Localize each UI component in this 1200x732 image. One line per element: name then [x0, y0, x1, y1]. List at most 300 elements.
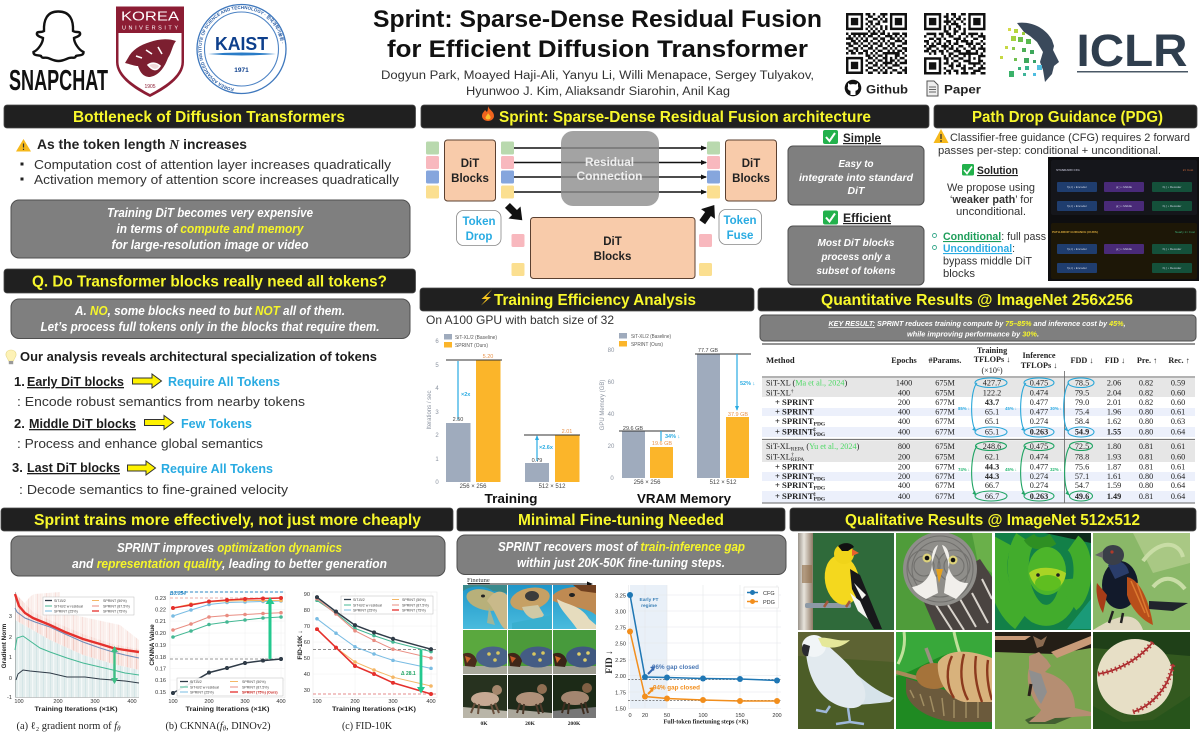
arrows: residual lines	[514, 148, 706, 192]
arrow: token drop	[501, 199, 528, 226]
arrow: token fuse	[695, 200, 721, 227]
chart: FID vs finetuning steps: 96% gap closed	[652, 665, 699, 671]
chart: FID vs finetuning steps: Early FT	[640, 597, 659, 603]
bar chart: VRAM memory: 256 × 256	[634, 480, 661, 486]
chart: FID vs finetuning steps: PDG	[763, 600, 775, 606]
annotations: blue percent labels: 85% ↓	[958, 406, 970, 411]
chart: CKNNA value: 0.16	[155, 678, 166, 684]
table rows: SiT-XL group: 1.96	[1107, 408, 1121, 416]
bar chart: VRAM memory: 40	[608, 412, 615, 418]
table rows: REPA group: 800	[898, 442, 910, 451]
table rows: SiT-XL group: 200	[898, 398, 910, 407]
item 3: last blocks: 3.	[12, 460, 23, 475]
bar chart: VRAM memory: VRAM Memory	[637, 491, 732, 506]
figure: standard CFG vs PDG pipeline: STANDARD CFG	[1056, 168, 1081, 172]
heading: PDG: Path Drop Guidance (PDG)	[972, 109, 1163, 126]
chart: FID-10K: 90	[304, 592, 310, 598]
table rows: REPA group: 44.3	[985, 472, 999, 481]
table rows: REPA group: 677M	[935, 462, 956, 472]
labels: step counts: 20K	[525, 721, 536, 727]
table rows: SiT-XL group: 677M	[935, 417, 956, 426]
table rows: REPA group: REPA	[791, 446, 804, 452]
text: conditional vs unconditional: blocks	[943, 268, 976, 280]
text: solution: unconditional.	[956, 206, 1026, 218]
text: CFG problem: Classifier-free guidance (CFG) requires 2 forward	[950, 132, 1190, 144]
callout: efficient: subset of tokens	[816, 265, 896, 277]
table header: Pre. ↑	[1137, 356, 1157, 365]
logo: KAIST: KOREA ADVANCED INSTITUTE OF SCIENCE AND TECHNOLOGY · 한국과학기술원 ·	[198, 6, 284, 92]
block: DiT left	[444, 140, 496, 201]
bar chart: VRAM memory: 0	[610, 476, 614, 482]
table rows: REPA group: (	[804, 442, 809, 451]
heading: qualitative results: Qualitative Results @ ImageNet 512x512	[845, 512, 1140, 529]
header: logos and title	[9, 4, 1188, 98]
box: residual connection	[561, 131, 659, 206]
item 3: last blocks: : Decode semantics to fine-grained velocity	[19, 483, 289, 497]
chart: FID-10K: 80	[304, 608, 310, 614]
callout: answer: Let’s process full tokens only in the blocks that require them.	[40, 320, 380, 334]
table rows: REPA group: 0.475	[1030, 442, 1048, 451]
table rows: REPA group: 0.61	[1171, 462, 1185, 472]
label: token drop	[456, 210, 501, 246]
figure: standard CFG vs PDG pipeline	[1048, 157, 1199, 281]
table rows: SiT-XL group: 0.60	[1171, 388, 1185, 398]
chart: FID-10K: SPRINT (87.5%)	[402, 604, 429, 608]
icon: lightning	[481, 290, 492, 306]
table: benchmark results	[762, 344, 1195, 503]
heading: PDG	[934, 105, 1197, 128]
item 1: early blocks: : Encode robust semantics from nearby tokens	[17, 395, 305, 409]
bar chart: VRAM memory: SPRINT (Ours)	[631, 342, 663, 348]
table rows: REPA group: 0.474	[1030, 452, 1048, 462]
bar chart: training speed: 3	[435, 410, 439, 416]
callout: key result: KEY RESULT: SPRINT reduces training compute by 75–85% and inference cost by 45%,	[828, 319, 1126, 328]
table rows: SiT-XL group: 79.0	[1075, 398, 1089, 407]
table rows: SiT-XL group: 54.9	[1075, 428, 1089, 436]
table rows: SiT-XL group: 65.1	[985, 408, 999, 416]
chart: FID vs finetuning steps: FID ↓	[605, 650, 615, 674]
callout: answer: A. NO, some blocks need to but NOT all of them.	[74, 304, 345, 318]
chart: FID-10K: SPRINT (75%)	[402, 608, 426, 612]
chart: CKNNA value: 0.21	[155, 619, 166, 625]
labels: step counts	[480, 721, 581, 727]
table rows: SiT-XL group: 400	[898, 428, 910, 436]
icon: warning	[16, 139, 31, 152]
figure: standard CFG vs PDG pipeline: f(x,t) • Encoder	[1067, 247, 1087, 251]
bar chart: training speed: 256 × 256	[460, 484, 487, 490]
bar chart: training speed: ×2.6x	[539, 445, 554, 451]
chart: gradient norm	[1, 592, 139, 732]
labels: step counts: 0K	[480, 721, 488, 727]
table rows: SiT-XL group: 0.80	[1139, 408, 1153, 416]
photo: goldfinch	[798, 533, 894, 630]
heading: training efficiency	[420, 288, 754, 311]
table rows: REPA group: 677M	[935, 472, 956, 481]
table rows: REPA group: SiT-XL	[766, 452, 791, 462]
logo: ICLR	[1000, 23, 1188, 82]
chart: FID vs finetuning steps: 50	[664, 713, 670, 719]
bar chart: training speed: Training	[484, 491, 538, 506]
chart: CKNNA value: SPRINT (75%) (Ours)	[242, 690, 278, 694]
bar chart: training speed: 6	[435, 339, 439, 345]
table rows: REPA group: 200	[898, 452, 910, 462]
table rows: SiT-XL group: 79.5	[1075, 388, 1089, 398]
chart: CKNNA value: SPRINT (87.5%)	[242, 686, 269, 690]
callout: simple: DiT	[848, 185, 866, 197]
callout: simple: Easy to	[838, 158, 874, 170]
title: for Efficient Diffusion Transformer	[387, 36, 808, 63]
chart: FID-10K: Δ 28.1	[401, 671, 416, 677]
QR code: Paper	[924, 14, 986, 73]
chart: FID vs finetuning steps: 3.25	[615, 594, 626, 600]
bar chart: training speed: 2.50	[453, 417, 463, 423]
bar chart: VRAM memory: SiT-XL/2 (Baseline)	[631, 334, 671, 340]
heading: quantitative results: Quantitative Results @ ImageNet 256x256	[821, 292, 1133, 309]
label: token drop: Drop	[466, 231, 492, 243]
text: solution: ‘weaker path’ for	[950, 194, 1033, 206]
bar chart: VRAM memory: 29.6 GB	[623, 426, 643, 432]
chart: gradient norm: SPRINT (50%)	[103, 599, 127, 603]
chart: CKNNA value	[149, 591, 286, 732]
heading: bottleneck	[4, 105, 416, 128]
callout: key result	[760, 315, 1196, 341]
bar chart: training speed: 2.01	[562, 429, 572, 435]
chart: gradient norm: (a) ℓ₂ gradient norm of f	[16, 721, 117, 732]
chart: gradient norm: SPRINT (75%)	[103, 610, 127, 614]
box: residual connection: Residual	[585, 157, 634, 169]
table rows: REPA group: 0.64	[1171, 481, 1185, 490]
authors: Hyunwoo J. Kim, Aliaksandr Siarohin, Anil Kag	[466, 86, 730, 98]
icon: light bulb	[6, 350, 16, 364]
annotations: blue improvement arcs	[972, 378, 1094, 437]
item 2: middle blocks	[14, 416, 263, 451]
label: token fuse	[719, 210, 762, 244]
QR code: Github	[846, 14, 907, 73]
table rows: REPA group: 248.6	[983, 442, 1001, 451]
title	[373, 6, 822, 63]
photo row: bighorn ram	[463, 675, 596, 718]
table rows: REPA group: 675M	[935, 442, 956, 451]
table rows: SiT-XL group: 2.01	[1107, 398, 1121, 407]
table rows: SiT-XL group: 58.4	[1075, 417, 1089, 426]
block: DiT right: DiT	[742, 158, 760, 170]
heading: bottleneck: Bottleneck of Diffusion Transformers	[73, 109, 345, 126]
table rows: SiT-XL group: 1.62	[1107, 417, 1121, 426]
chart: gradient norm: -1	[7, 695, 12, 701]
icon: fire	[482, 106, 494, 121]
figure: standard CFG vs PDG pipeline: h(·) • Decoder	[1163, 266, 1181, 270]
panel: path drop guidance	[932, 105, 1199, 281]
heading: qualitative results	[790, 508, 1196, 531]
table rows: SiT-XL group: 675M	[935, 378, 956, 388]
table header: FDD ↓	[1071, 356, 1093, 365]
tokens: before right block	[707, 142, 720, 198]
table rows: REPA group: 62.1	[985, 452, 999, 462]
block: DiT left: Blocks	[451, 173, 489, 185]
item 1: early blocks: Early DiT blocks	[27, 374, 124, 389]
logo: KAIST: 1971	[234, 67, 249, 74]
text: GPU setup: On A100 GPU with batch size of 32	[426, 313, 614, 327]
table rows: SiT-XL group: PDG	[814, 432, 826, 438]
table rows: SiT-XL group: 0.477	[1030, 408, 1048, 416]
table rows: SiT-XL group: SiT-XL (Ma et al., 2024)	[766, 378, 848, 388]
table rows: REPA group: + SPRINT	[775, 491, 814, 501]
chart: gradient norm: Gradient Norm	[1, 623, 8, 668]
table rows: REPA group: 66.7	[985, 481, 999, 490]
table rows: SiT-XL group: 122.2	[983, 388, 1001, 398]
table rows: REPA group: SiT-XL	[766, 442, 791, 451]
callout: optimization dynamics	[11, 536, 445, 576]
chart: FID vs finetuning steps: 2.25	[615, 658, 626, 664]
text: conditional vs unconditional: bypass middle DiT	[943, 256, 1032, 268]
icon: warning	[934, 129, 948, 143]
table rows: REPA group	[766, 442, 1185, 502]
bullet list: Computation cost of attention layer increases quadratically	[34, 158, 392, 172]
chart: FID vs finetuning steps: 200	[772, 713, 782, 719]
chart: gradient norm: 1	[9, 655, 12, 661]
chart: CKNNA value: , DINOv2)	[226, 721, 271, 732]
callout: efficient: Efficient	[843, 211, 891, 225]
bar chart: VRAM memory	[600, 333, 756, 506]
table rows: SiT-XL group	[766, 378, 1185, 438]
chart: CKNNA value: Δ0.054	[169, 591, 186, 597]
figure: standard CFG vs PDG pipeline: g(·) • Middle	[1116, 247, 1132, 251]
callout: optimization dynamics: SPRINT improves optimization dynamics	[117, 541, 342, 555]
chart: FID-10K: FID-10K ↓	[297, 630, 304, 660]
logo: Korea University: KOREA	[121, 10, 180, 24]
chart: CKNNA value: (b) CKNNA(f	[166, 721, 223, 732]
annotations: green percent labels: 32% ↓	[1050, 467, 1062, 472]
table rows: REPA group: 0.274	[1030, 472, 1048, 481]
chart: FID-10K: 70	[304, 624, 310, 630]
table rows: SiT-XL group: 0.64	[1171, 428, 1185, 436]
table rows: REPA group: 0.80	[1139, 472, 1153, 481]
block: DiT right	[726, 140, 776, 201]
chart: FID-10K: SiT-B/2	[353, 598, 365, 602]
bar chart: VRAM memory: 60	[608, 380, 615, 386]
chart: CKNNA value: 0.22	[155, 608, 166, 614]
chart: FID-10K: 300	[388, 699, 398, 705]
heading: training efficiency: Training Efficiency Analysis	[494, 292, 696, 309]
photo row: box turtle	[463, 630, 600, 674]
chart: FID-10K: 400	[426, 699, 436, 705]
table rows: SiT-XL group: 0.60	[1171, 398, 1185, 407]
table header: TFLOPs ↓	[974, 355, 1010, 364]
item 1: early blocks	[14, 374, 305, 409]
bar chart: VRAM memory: 52% ↓	[740, 381, 756, 387]
bar chart: training speed: 0.79	[532, 458, 542, 464]
heading: question: Q. Do Transformer blocks really need all tokens?	[32, 274, 387, 290]
item 1: early blocks: Require All Tokens	[168, 374, 280, 389]
table rows: REPA group: 0.477	[1030, 462, 1048, 472]
chart: FID vs finetuning steps: regime	[641, 603, 657, 609]
label: token fuse: Token	[723, 215, 757, 227]
panel: bottleneck of diffusion transformers	[4, 105, 416, 258]
bullet list: Activation memory of attention score increases quadratically	[34, 173, 400, 187]
labels: step counts: 200K	[568, 721, 581, 727]
chart: gradient norm: 0	[9, 676, 12, 682]
table rows: SiT-XL group: 427.7	[983, 378, 1001, 388]
chart: FID-10K: Training Iterations (×1K)	[332, 706, 416, 713]
table rows: REPA group: ‡	[813, 492, 816, 497]
panel: sprint trains more effectively	[1, 508, 453, 732]
table rows: SiT-XL group: 0.63	[1171, 417, 1185, 426]
logo: Snapchat	[9, 12, 108, 97]
bar chart: training speed: SPRINT (Ours)	[455, 343, 488, 349]
table rows: SiT-XL group: †	[791, 388, 794, 394]
chart: FID-10K: 50	[304, 656, 310, 662]
table rows: REPA group: PDG	[814, 496, 826, 502]
chart: FID vs finetuning steps: 2.00	[615, 674, 626, 680]
table rows: REPA group: 72.5	[1075, 442, 1089, 451]
text: analysis heading: Our analysis reveals architectural specialization of tokens	[20, 349, 377, 364]
callout: expensive training: Training DiT becomes very expensive	[107, 206, 313, 220]
authors: Dogyun Park, Moayed Haji-Ali, Yanyu Li, Willi Menapace, Sergey Tulyakov,	[381, 70, 814, 82]
block: DiT bottom	[530, 218, 695, 278]
table rows: SiT-XL group: 400	[898, 388, 910, 398]
chart: CKNNA value: Training Iterations (×1K)	[186, 706, 270, 713]
block: DiT bottom: DiT	[603, 236, 622, 248]
annotations: blue percent labels	[958, 406, 1062, 411]
table rows: SiT-XL group: 0.274	[1030, 417, 1048, 426]
photo: green snake	[995, 533, 1091, 630]
bar chart: training speed: 512 × 512	[539, 484, 566, 490]
table rows: REPA group: 0.80	[1139, 481, 1153, 490]
table rows: REPA group: 400	[898, 492, 910, 501]
table rows: SiT-XL group: 0.475	[1030, 378, 1048, 388]
table rows: SiT-XL group: + SPRINT	[775, 397, 814, 407]
table rows: SiT-XL group: 0.477	[1030, 398, 1048, 407]
diagram: residual fusion	[426, 131, 776, 278]
table rows: SiT-XL group: 677M	[935, 428, 956, 436]
heading: trains effectively	[1, 508, 453, 531]
chart: FID vs finetuning steps: 0	[628, 713, 632, 719]
callout: efficient: process only a	[821, 251, 891, 263]
chart: FID-10K: 40	[304, 672, 310, 678]
chart: FID-10K: 200	[350, 699, 360, 705]
table rows: REPA group: 1.59	[1107, 481, 1121, 490]
chart: FID-10K: (c) FID-10K	[342, 721, 392, 732]
table rows: REPA group: + SPRINT	[775, 480, 814, 490]
block: DiT bottom: Blocks	[594, 251, 631, 263]
table rows: SiT-XL group: PDG	[814, 421, 826, 427]
panel: sprint architecture	[421, 105, 929, 285]
table rows: REPA group: 400	[898, 481, 910, 490]
table rows: REPA group: 0.81	[1139, 462, 1153, 472]
table rows: REPA group: 0.64	[1171, 492, 1185, 501]
chart: CKNNA value: 0.23	[155, 596, 166, 602]
chart: FID vs finetuning steps	[605, 585, 782, 726]
figure: standard CFG vs PDG pipeline: f(x,t) • Encoder	[1067, 266, 1087, 270]
logo: Korea University	[116, 6, 184, 97]
table rows: REPA group: 1.80	[1107, 442, 1121, 451]
table rows: REPA group: 44.3	[985, 462, 999, 472]
table rows: REPA group: 0.61	[1171, 442, 1185, 451]
table rows: SiT-XL group: 0.82	[1139, 388, 1153, 398]
chart: FID-10K: SPRINT (25%)	[353, 608, 377, 612]
chart: gradient norm: 400	[127, 699, 137, 705]
table rows: SiT-XL group: + SPRINT	[775, 416, 814, 426]
chart: FID-10K: 60	[304, 640, 310, 646]
bar chart: VRAM memory: 19.6 GB	[652, 441, 672, 447]
table rows: SiT-XL group: 0.59	[1171, 378, 1185, 388]
icon: Paper	[927, 81, 981, 96]
bar chart: training speed: 0	[435, 480, 439, 486]
table rows: SiT-XL group: SiT-XL	[766, 388, 791, 398]
chart: CKNNA value: 0.20	[155, 631, 166, 637]
icon: Github: Github	[866, 82, 908, 96]
bar chart: VRAM memory: 512 × 512	[710, 480, 737, 486]
table rows: REPA group: 0.64	[1171, 472, 1185, 481]
bar chart: training speed	[427, 334, 580, 506]
callout: expensive training: in terms of compute and memory	[116, 222, 304, 236]
logo: Korea University: 1905	[144, 84, 156, 90]
chart: gradient norm: 300	[90, 699, 100, 705]
table rows: REPA group: 1.87	[1107, 462, 1121, 472]
annotations: blue percent labels: 30% ↓	[1050, 406, 1062, 411]
callout: expensive training	[11, 200, 410, 258]
chart: gradient norm: SPRINT (25%)	[54, 610, 78, 614]
chart: FID-10K: SiT-B/2 w residual	[353, 604, 382, 608]
table rows: SiT-XL group: 65.1	[985, 428, 999, 436]
photo: snail	[896, 632, 992, 729]
callout: simple	[788, 130, 924, 205]
annotations: green percent labels	[958, 467, 1062, 472]
table rows: SiT-XL group: + SPRINT	[775, 426, 814, 436]
bar chart: training speed: SiT-XL/2 (Baseline)	[455, 335, 497, 341]
table rows: REPA group: 49.6	[1075, 492, 1089, 501]
chart: CKNNA value: 200	[204, 699, 214, 705]
bar chart: VRAM memory: 77.7 GB	[698, 348, 718, 354]
photo: coucal bird	[1093, 533, 1190, 630]
chart: CKNNA value: 0.19	[155, 643, 166, 649]
chart: FID vs finetuning steps: 100	[698, 713, 708, 719]
table rows: REPA group: + SPRINT	[775, 471, 814, 481]
figure: standard CFG vs PDG pipeline: 2× Cost	[1183, 168, 1193, 172]
chart: CKNNA value: 0.17	[155, 666, 166, 672]
table rows: REPA group: 78.8	[1075, 452, 1089, 462]
chart: FID vs finetuning steps: 1.50	[615, 706, 626, 712]
callout: efficient: Most DiT blocks	[818, 237, 895, 249]
text: solution	[947, 164, 1035, 218]
bar chart: VRAM memory: 37.9 GB	[728, 412, 748, 418]
table rows: REPA group: 57.1	[1075, 472, 1089, 481]
logo: Snapchat: SNAPCHAT	[9, 65, 108, 97]
table rows: SiT-XL group: 78.5	[1075, 378, 1089, 388]
heading: quantitative results	[758, 288, 1196, 311]
table rows: SiT-XL group: 2.04	[1107, 388, 1121, 398]
table rows: SiT-XL group: 677M	[935, 398, 956, 407]
chart: FID vs finetuning steps: 3.00	[615, 610, 626, 616]
chart: CKNNA value: 0.18	[155, 655, 166, 661]
chart: gradient norm: SiT-B/2	[54, 599, 66, 603]
text: solution: Solution	[977, 165, 1018, 177]
text: conditional vs unconditional	[932, 231, 1046, 280]
table rows: SiT-XL group: 400	[898, 408, 910, 416]
text: solution: We propose using	[947, 182, 1035, 194]
callout: train-inference gap	[457, 535, 786, 574]
chart: gradient norm: Training Iterations (×1K)	[34, 706, 118, 713]
chart: FID-10K: 30	[304, 688, 310, 694]
bar chart: VRAM memory: 20	[608, 444, 615, 450]
callout: answer	[11, 299, 410, 338]
callout: train-inference gap: SPRINT recovers most of train-inference gap	[498, 540, 745, 554]
table rows: REPA group: 200	[898, 462, 910, 472]
box: residual connection: Connection	[576, 171, 642, 183]
block: DiT left: DiT	[461, 158, 479, 170]
callout: key result: while improving performance by 30%.	[907, 330, 1039, 338]
callout: expensive training: for large-resolution image or video	[112, 238, 309, 252]
